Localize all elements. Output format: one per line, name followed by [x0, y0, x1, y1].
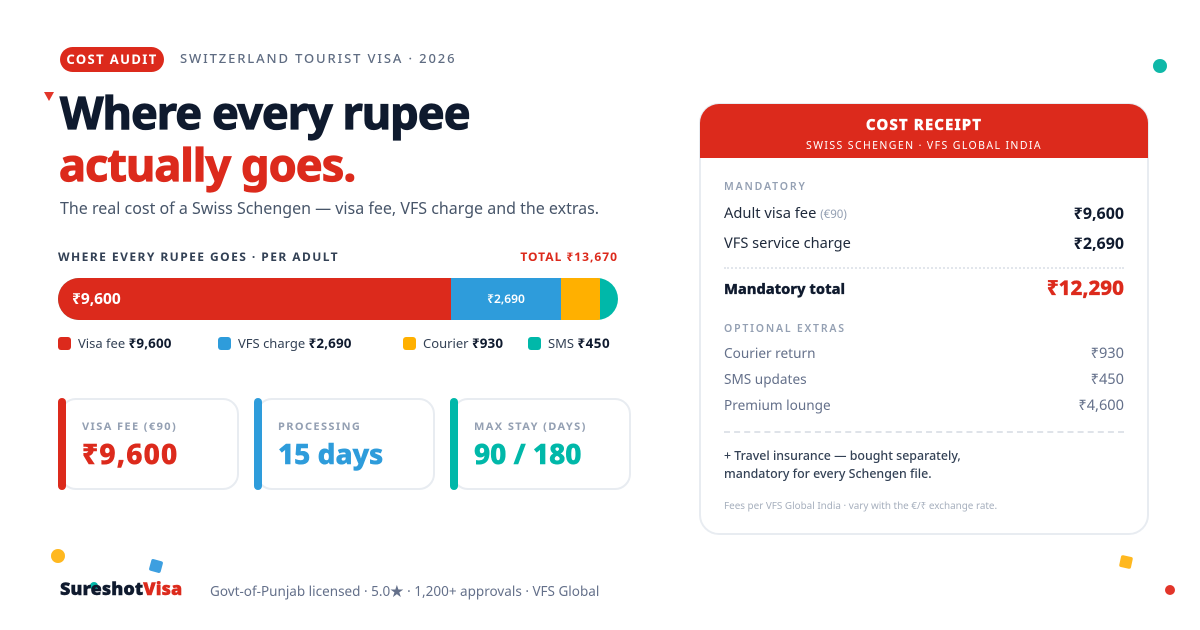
note: travel insurance: + Travel insurance — bought separately,: [724, 447, 961, 464]
stat accent: processing: [254, 398, 262, 490]
row: SMS updates: SMS updates: [724, 369, 807, 388]
decoration: blue square: [149, 559, 163, 573]
row: VFS service charge: [724, 232, 1124, 254]
stat label: max stay: MAX STAY (DAYS): [474, 419, 587, 434]
row: adult visa fee: ₹9,600: [1074, 202, 1124, 224]
eyebrow text: SWITZERLAND TOURIST VISA · 2026: [180, 49, 456, 67]
receipt title: COST RECEIPT: [866, 115, 982, 135]
stat card: max stay: [452, 398, 631, 490]
footer text: Govt-of-Punjab licensed · 5.0★ · 1,200+ approvals · VFS Global: [210, 582, 599, 600]
stat label: processing: PROCESSING: [278, 419, 361, 434]
badge: cost audit: [60, 47, 164, 72]
receipt header: [700, 104, 1148, 158]
segment: VFS charge: [451, 278, 561, 320]
title: actually goes.: [59, 134, 355, 195]
legend swatch: courier: [403, 337, 416, 350]
logo: SureshotVisa: [60, 577, 182, 601]
row: premium lounge: [724, 395, 1124, 415]
receipt subtitle: SWISS SCHENGEN · VFS GLOBAL INDIA: [806, 139, 1042, 153]
legend: SMS: SMS ₹450: [548, 334, 610, 352]
decoration: yellow dot: [51, 549, 65, 563]
row: courier return: Courier return: [724, 343, 816, 362]
legend: visa fee: Visa fee ₹9,600: [78, 334, 172, 352]
row: VFS service charge: VFS service charge: [724, 233, 851, 253]
legend: [78, 334, 610, 352]
icon: red triangle marker: [44, 92, 54, 101]
row: mandatory total: [724, 274, 1124, 302]
stat card: visa fee: [60, 398, 239, 490]
title: Where every rupee: [60, 82, 470, 143]
legend swatch: SMS: [528, 337, 541, 350]
section label: mandatory: MANDATORY: [724, 180, 807, 194]
row: mandatory total: ₹12,290: [1047, 274, 1124, 302]
chart heading: WHERE EVERY RUPEE GOES · PER ADULT: [58, 248, 339, 265]
stat value: max stay: 90 / 180: [474, 435, 581, 473]
title: [59, 82, 470, 195]
subtitle: The real cost of a Swiss Schengen — visa fee, VFS charge and the extras.: [60, 197, 599, 219]
segment: VFS charge: ₹2,690: [487, 290, 525, 307]
segment: visa fee: [58, 278, 451, 320]
panel: cost receipt: [699, 103, 1149, 535]
row: mandatory total: Mandatory total: [724, 279, 845, 299]
row: courier return: ₹930: [1091, 343, 1124, 363]
segment: courier: [561, 278, 600, 320]
legend: VFS charge: VFS charge ₹2,690: [238, 334, 352, 352]
decoration: yellow square: [1119, 555, 1133, 569]
row: VFS service charge: ₹2,690: [1074, 232, 1124, 254]
stat value: processing: 15 days: [278, 435, 383, 473]
stat accent: visa fee: [58, 398, 66, 490]
row: premium lounge: ₹4,600: [1078, 395, 1124, 415]
stacked bar chart: [58, 278, 618, 320]
row: courier return: [724, 343, 1124, 363]
row: SMS updates: ₹450: [1091, 369, 1124, 389]
segment: visa fee: ₹9,600: [72, 287, 121, 309]
stat card: processing: [256, 398, 435, 490]
row: adult visa fee: Adult visa fee (€90): [724, 203, 847, 223]
badge: cost audit: COST AUDIT: [66, 50, 158, 68]
decoration: red dot: [1165, 585, 1175, 595]
decoration: teal dot behind logo: [90, 582, 98, 590]
footnote: Fees per VFS Global India · vary with the €/₹ exchange rate.: [724, 498, 997, 512]
section label: optional extras: OPTIONAL EXTRAS: [724, 322, 846, 336]
legend swatch: visa fee: [58, 337, 71, 350]
stat label: visa fee: VISA FEE (€90): [82, 419, 177, 434]
legend swatch: VFS charge: [218, 337, 231, 350]
legend: courier: Courier ₹930: [423, 334, 503, 352]
row: premium lounge: Premium lounge: [724, 395, 831, 414]
note: travel insurance: mandatory for every Schengen file.: [724, 465, 932, 482]
row: adult visa fee: [724, 202, 1124, 224]
note: travel insurance: [724, 447, 961, 482]
row: SMS updates: [724, 369, 1124, 389]
stat value: visa fee: ₹9,600: [82, 435, 178, 473]
chart total: TOTAL ₹13,670: [520, 248, 618, 265]
decoration: teal dot top right: [1153, 59, 1167, 73]
stat accent: max stay: [450, 398, 458, 490]
